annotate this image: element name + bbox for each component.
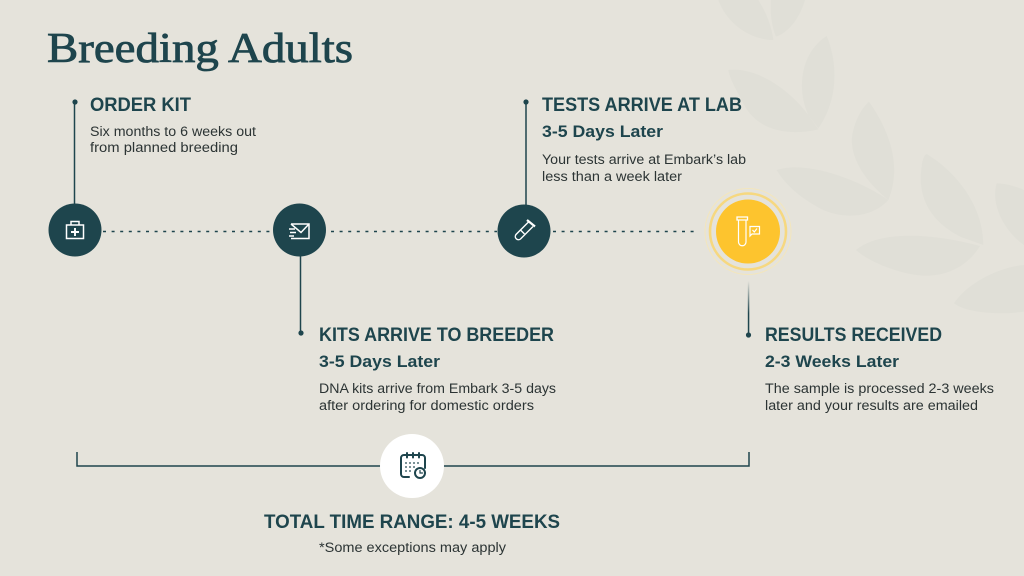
note: exceptions: *Some exceptions may apply	[319, 540, 506, 555]
text: results description: later and your results are emailed	[765, 398, 978, 413]
icon: test tube with results on yellow circle	[705, 188, 791, 274]
decorative leaves	[718, 0, 1024, 313]
title: Breeding Adults	[47, 26, 353, 72]
heading: order kit: ORDER KIT	[90, 94, 191, 116]
heading: kits arrive: KITS ARRIVE TO BREEDER	[319, 324, 554, 346]
text: results description: The sample is processed 2-3 weeks	[765, 381, 994, 396]
subheading: kits arrive timing: 3-5 Days Later	[319, 352, 440, 371]
text: tests arrive description: Your tests arrive at Embark’s lab	[542, 152, 746, 167]
text: results description	[765, 381, 994, 413]
heading: tests arrive: TESTS ARRIVE AT LAB	[542, 94, 742, 116]
step 3: tests arrive at lab	[498, 94, 746, 258]
total time bracket	[77, 452, 749, 466]
icon: envelope	[273, 204, 326, 256]
subheading: results timing: 2-3 Weeks Later	[765, 352, 899, 371]
text: tests arrive description	[542, 152, 746, 184]
text: tests arrive description: less than a week later	[542, 169, 683, 184]
leader line 3	[523, 99, 529, 206]
heading: total time range: TOTAL TIME RANGE: 4-5 WEEKS	[264, 511, 560, 533]
subheading: tests arrive timing: 3-5 Days Later	[542, 122, 663, 141]
leader line 1	[72, 99, 78, 206]
step 4: results received	[705, 188, 994, 413]
text: order kit description: Six months to 6 weeks out	[90, 124, 256, 139]
text: order kit description: from planned breeding	[90, 140, 238, 155]
step 2: kits arrive to breeder	[273, 204, 556, 413]
step 1: order kit	[48, 94, 256, 256]
text: kits arrive description	[319, 381, 556, 413]
leader line 2	[298, 256, 304, 336]
icon: test tube	[498, 204, 550, 258]
icon: calendar with clock	[380, 434, 444, 498]
text: kits arrive description: after ordering for domestic orders	[319, 398, 534, 413]
leader line 4	[746, 281, 751, 338]
heading: results received: RESULTS RECEIVED	[765, 324, 942, 346]
icon: first aid kit	[48, 204, 102, 256]
text: kits arrive description: DNA kits arrive from Embark 3-5 days	[319, 381, 556, 396]
timeline dotted connector	[103, 230, 697, 232]
text: order kit description	[90, 124, 256, 155]
